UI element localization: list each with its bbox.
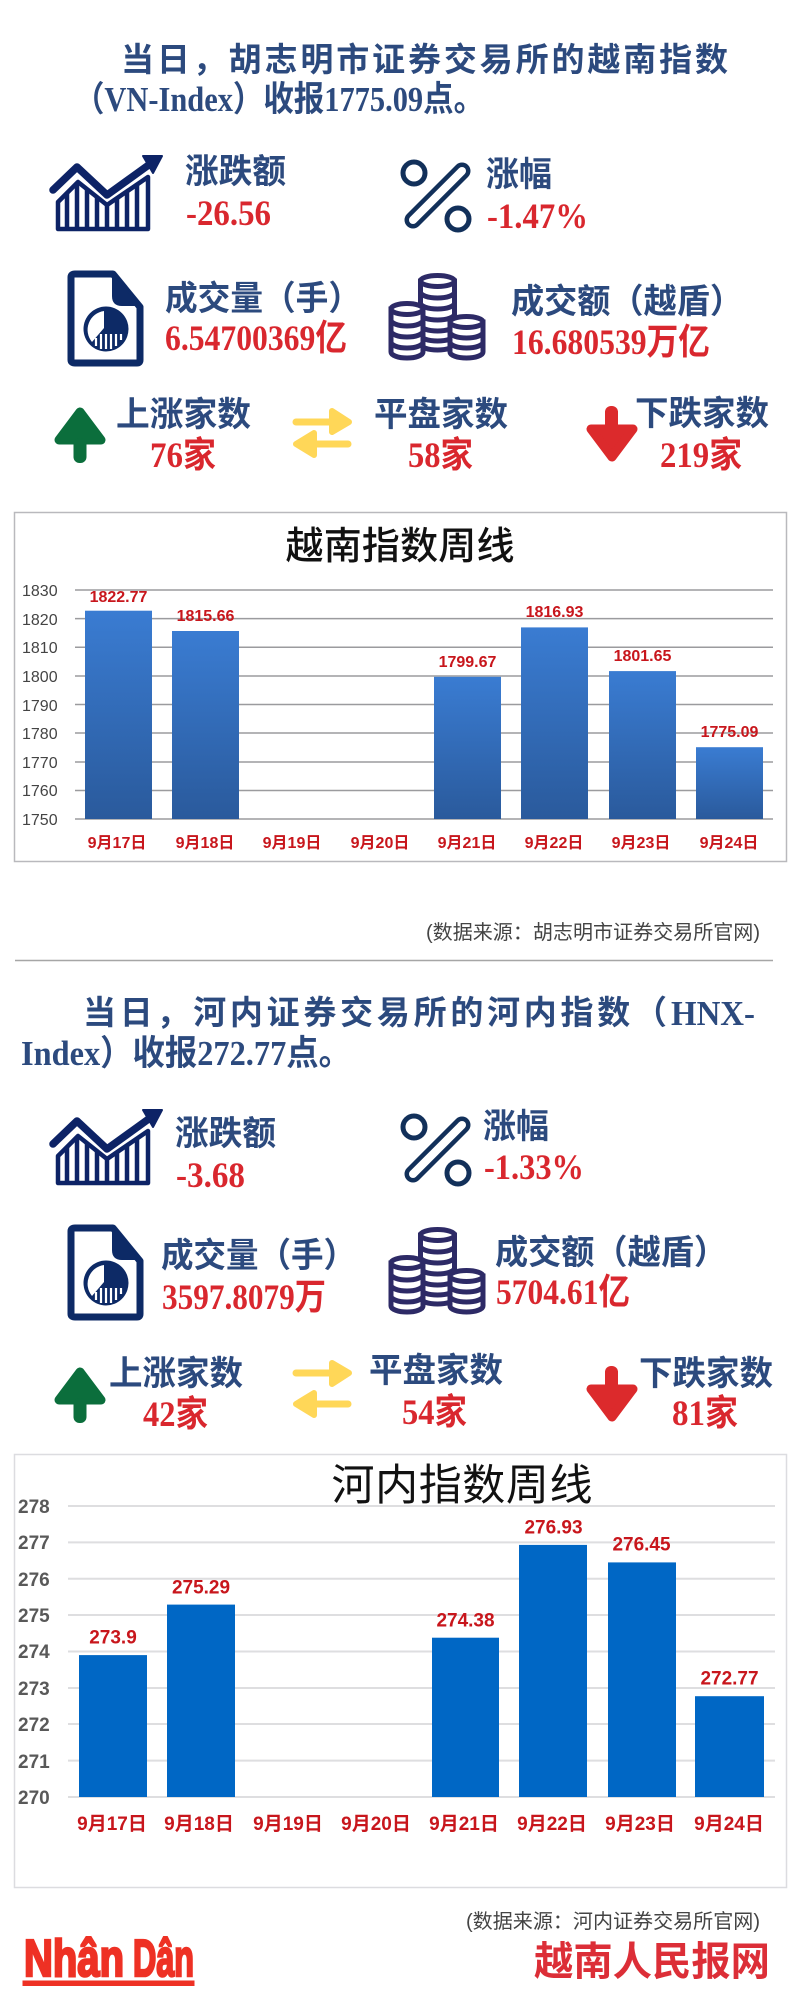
icon: green up arrow — [59, 1372, 101, 1423]
value labels: 1816.93 — [526, 604, 584, 621]
value labels: 1775.09 — [701, 724, 759, 741]
stat: decliners: 81家 — [672, 1393, 738, 1433]
heading: VN-Index close: （VN-Index）收报1775.09点。 — [74, 80, 484, 119]
heading: HNX-Index close: Index）收报272.77点。 — [21, 1034, 351, 1073]
stat: volume: 成交量（手） — [165, 280, 361, 318]
section: HNX-Index summary — [21, 994, 773, 1434]
stat: advancers: 76家 — [150, 435, 216, 475]
icon: rising chart — [53, 156, 162, 229]
heading: VN-Index close: 当日，胡志明市证券交易所的越南指数 — [121, 42, 728, 79]
heading: HNX-Index close: HNX- — [671, 994, 755, 1033]
x axis labels: 9月21日 — [438, 835, 496, 852]
stat: decliners — [635, 395, 769, 475]
bars — [79, 1545, 764, 1797]
stat: turnover — [495, 1234, 727, 1312]
y axis labels — [18, 1497, 50, 1809]
y axis labels: 1790 — [22, 698, 58, 715]
value labels — [90, 589, 759, 741]
icon: yellow swap arrows — [296, 1363, 349, 1415]
stat: advancers — [116, 396, 251, 475]
x axis labels: 9月19日 — [253, 1814, 323, 1835]
stat: change percent: 涨幅 — [483, 1108, 549, 1146]
x axis labels: 9月19日 — [263, 835, 321, 852]
x axis labels: 9月18日 — [176, 835, 234, 852]
icon: rising chart — [53, 1110, 162, 1183]
icon: red down arrow — [591, 1366, 633, 1417]
chart title: 河内指数周线 — [332, 1462, 592, 1510]
stat: turnover: 成交额（越盾） — [511, 283, 743, 321]
brand: site name: 越南人民报网 — [534, 1940, 770, 1984]
stat: decliners: 219家 — [660, 435, 742, 475]
source note: (数据来源：河内证券交易所官网) — [466, 1910, 760, 1933]
y axis labels: 1780 — [22, 726, 58, 743]
value labels: 276.93 — [524, 1518, 583, 1538]
stat: unchanged — [374, 396, 508, 475]
stat: change amount — [185, 153, 286, 233]
x axis labels: 9月20日 — [341, 1814, 411, 1835]
y axis labels: 1750 — [22, 812, 58, 829]
stat: turnover: 5704.61亿 — [496, 1272, 630, 1312]
stat: decliners: 下跌家数 — [635, 395, 769, 433]
stat: turnover: 16.680539万亿 — [512, 322, 710, 362]
stat: change percent — [486, 156, 588, 236]
chart title: 越南指数周线 — [286, 526, 514, 568]
y axis labels: 1820 — [22, 612, 58, 629]
heading: HNX-Index close: 当日，河内证券交易所的河内指数（ — [83, 995, 667, 1032]
y axis labels: 278 — [18, 1497, 50, 1518]
source note: (数据来源：胡志明市证券交易所官网) — [426, 921, 760, 944]
stat: advancers: 42家 — [143, 1394, 208, 1434]
x axis labels: 9月23日 — [605, 1814, 675, 1835]
y axis labels: 271 — [18, 1752, 50, 1773]
stat: decliners: 下跌家数 — [639, 1355, 773, 1393]
x axis labels: 9月17日 — [88, 835, 146, 852]
y axis labels: 277 — [18, 1533, 50, 1554]
stat: turnover: 成交额（越盾） — [495, 1234, 727, 1272]
panel: HNX-Index weekly chart — [14, 1454, 786, 1888]
y axis labels: 275 — [18, 1606, 50, 1627]
value labels: 1822.77 — [90, 589, 148, 606]
x axis labels: 9月24日 — [700, 835, 758, 852]
stat: advancers: 上涨家数 — [116, 396, 251, 434]
x axis labels: 9月18日 — [164, 1814, 234, 1835]
icon: green up arrow — [59, 412, 101, 463]
value labels — [89, 1518, 759, 1690]
stat: turnover — [511, 283, 743, 362]
y axis labels: 1770 — [22, 755, 58, 772]
icon: red down arrow — [591, 406, 633, 457]
stat: advancers — [109, 1355, 243, 1434]
x axis labels: 9月17日 — [77, 1814, 147, 1835]
stat: volume: 成交量（手） — [161, 1237, 356, 1275]
value labels: 1799.67 — [439, 654, 497, 671]
stat: unchanged: 54家 — [402, 1392, 467, 1432]
section: VN-Index summary — [53, 42, 769, 475]
y axis labels: 1760 — [22, 783, 58, 800]
stat: change amount: -26.56 — [186, 193, 271, 233]
stat: volume — [165, 280, 361, 358]
x axis labels: 9月20日 — [351, 835, 409, 852]
icon: coin stacks — [391, 276, 483, 358]
heading: HNX-Index close — [21, 994, 755, 1073]
heading: VN-Index close — [74, 42, 728, 119]
stat: change percent — [483, 1108, 584, 1187]
icon: percent — [403, 162, 469, 230]
value labels: 272.77 — [700, 1668, 759, 1690]
x axis labels: 9月22日 — [525, 835, 583, 852]
y axis labels: 270 — [18, 1788, 50, 1809]
value labels: 274.38 — [436, 1610, 495, 1632]
stat: change percent: 涨幅 — [486, 156, 552, 194]
icon: yellow swap arrows — [296, 411, 349, 455]
bars — [85, 611, 763, 819]
value labels: 1801.65 — [614, 648, 672, 665]
y axis labels: 1800 — [22, 669, 58, 686]
stat: change amount: 涨跌额 — [175, 1115, 276, 1153]
panel: VN-Index weekly chart — [14, 512, 786, 862]
icon: coin stacks — [391, 1230, 483, 1312]
stat: change percent: -1.47% — [487, 196, 588, 236]
y axis labels: 1810 — [22, 640, 58, 657]
value labels: 273.9 — [89, 1628, 137, 1648]
stat: change amount: 涨跌额 — [185, 153, 286, 191]
x axis labels — [88, 835, 758, 852]
x axis labels — [77, 1814, 764, 1835]
y axis labels: 1830 — [22, 583, 58, 600]
value labels: 275.29 — [172, 1578, 230, 1598]
x axis labels: 9月24日 — [694, 1814, 764, 1835]
stat: unchanged — [369, 1352, 503, 1432]
logo: Nhan Dan: Nhân — [24, 1930, 124, 1988]
y axis labels: 274 — [18, 1642, 50, 1663]
stat: decliners — [639, 1355, 773, 1433]
icon: document with pie chart — [71, 1228, 140, 1317]
stat: volume: 3597.8079万 — [162, 1277, 326, 1317]
stat: volume — [161, 1237, 356, 1317]
stat: change percent: -1.33% — [484, 1147, 584, 1187]
value labels: 1815.66 — [177, 608, 235, 625]
stat: unchanged: 58家 — [408, 435, 473, 475]
logo: Nhan Dan: Dân — [133, 1930, 194, 1988]
stat: unchanged: 平盘家数 — [369, 1352, 503, 1390]
y axis labels — [22, 583, 58, 829]
stat: change amount — [175, 1115, 276, 1195]
x axis labels: 9月23日 — [612, 835, 670, 852]
x axis labels: 9月22日 — [517, 1814, 587, 1835]
y axis labels: 272 — [18, 1715, 50, 1736]
stat: change amount: -3.68 — [176, 1155, 245, 1195]
x axis labels: 9月21日 — [429, 1814, 499, 1835]
y axis labels: 273 — [18, 1679, 50, 1700]
stat: advancers: 上涨家数 — [109, 1355, 243, 1393]
stat: unchanged: 平盘家数 — [374, 396, 508, 434]
icon: percent — [403, 1116, 469, 1184]
y axis labels: 276 — [18, 1570, 50, 1591]
value labels: 276.45 — [612, 1534, 671, 1556]
icon: document with pie chart — [71, 274, 140, 363]
stat: volume: 6.54700369亿 — [165, 318, 347, 358]
